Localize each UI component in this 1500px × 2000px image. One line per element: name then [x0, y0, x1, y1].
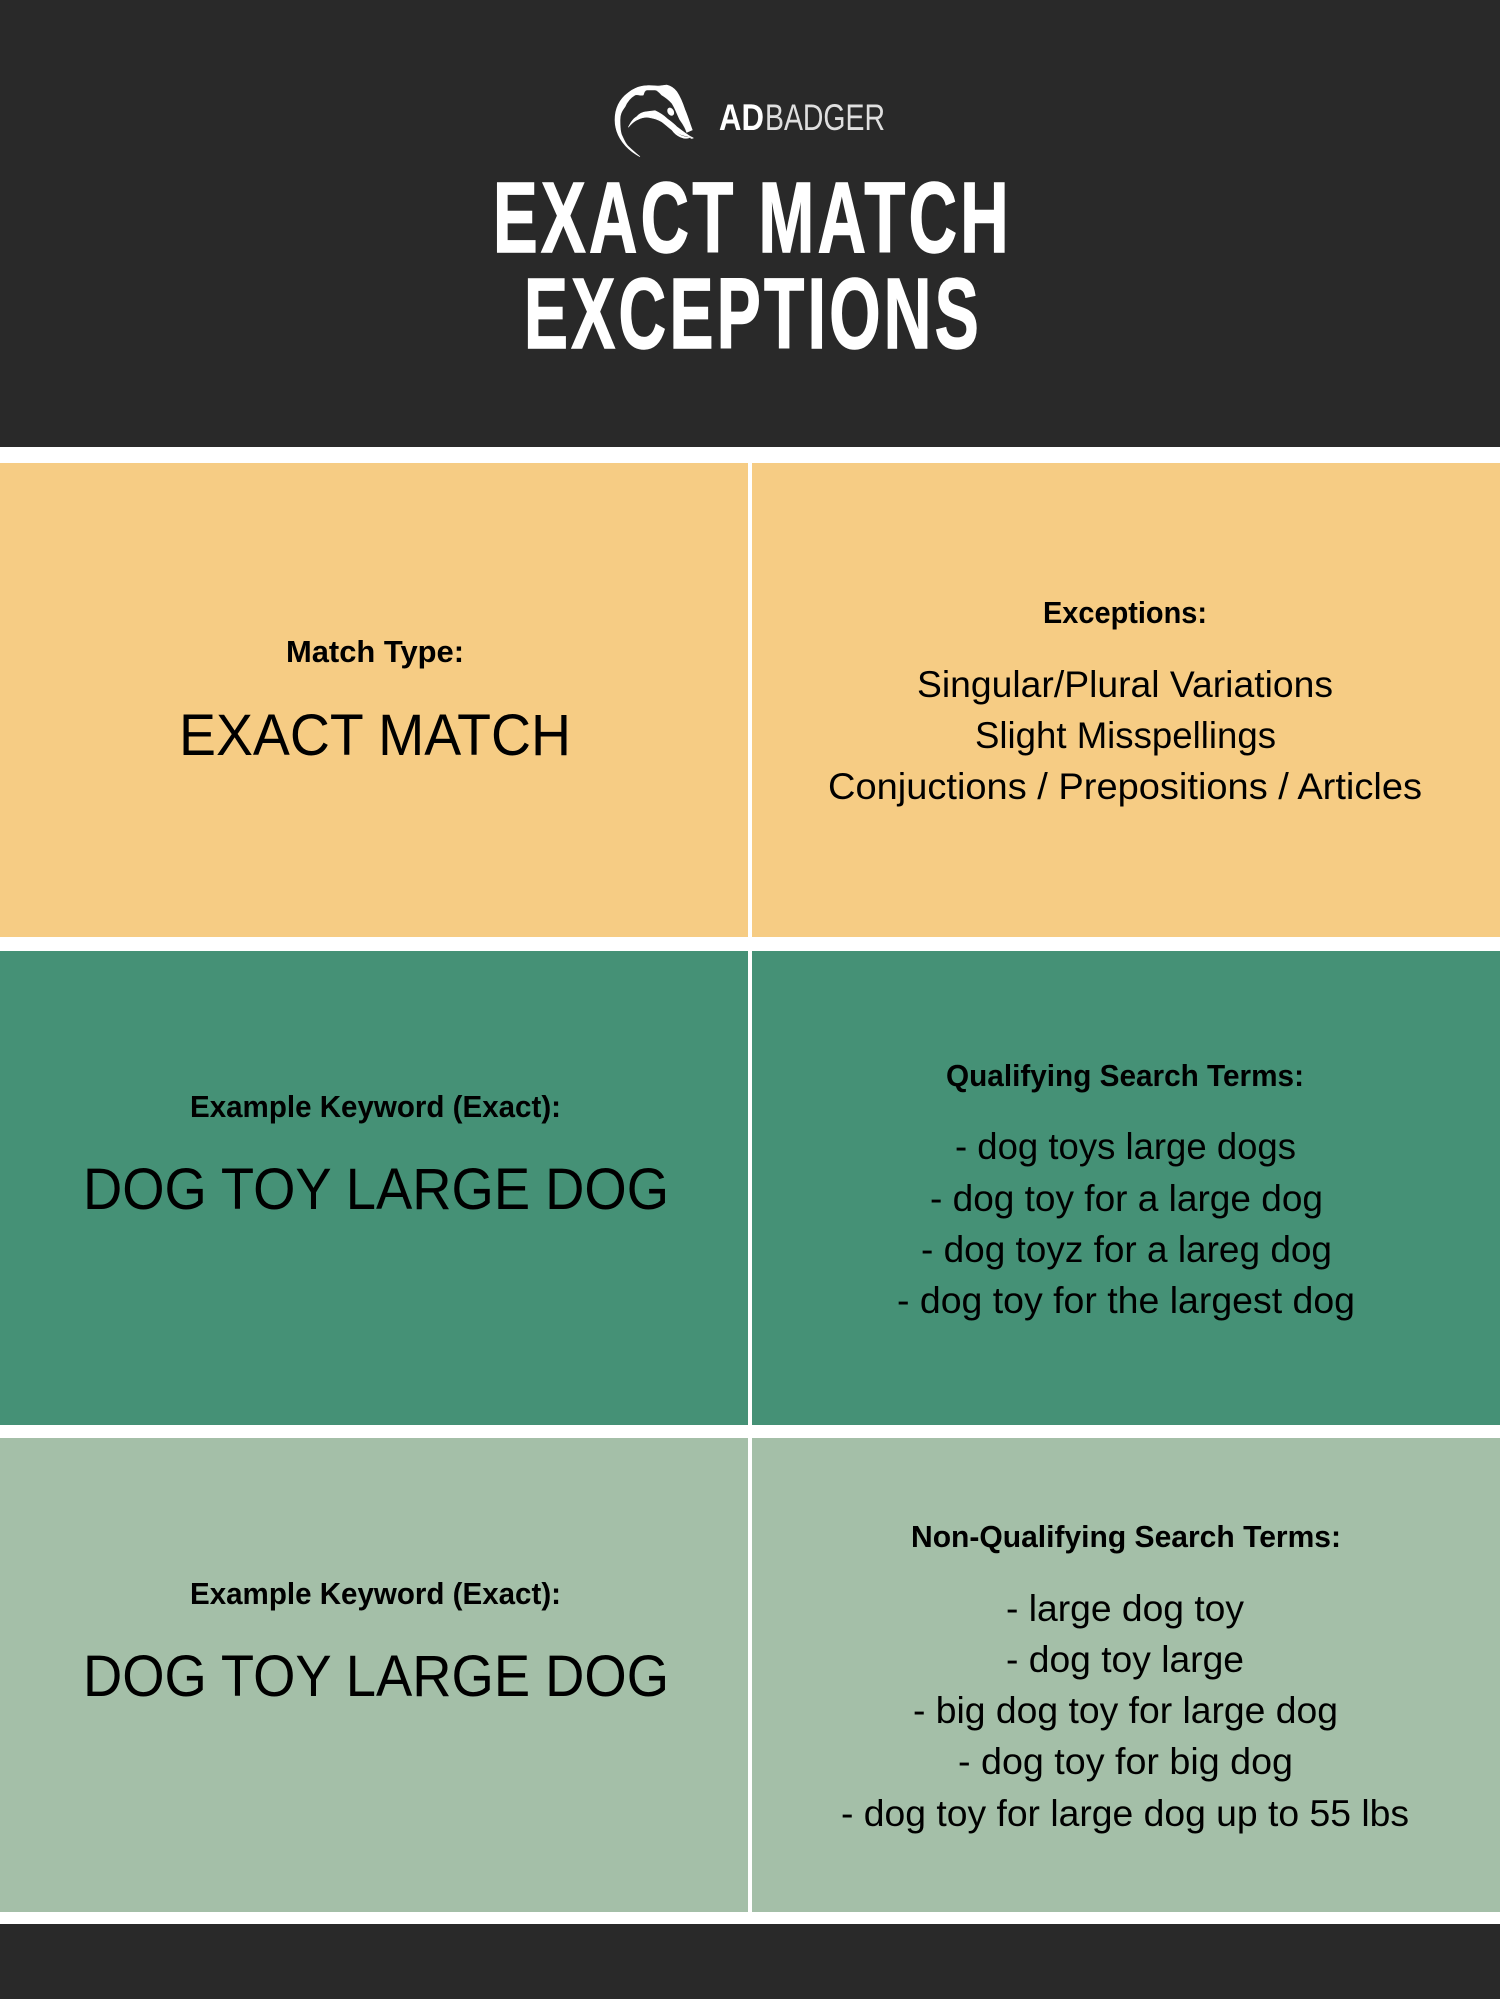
panel: exceptions	[752, 463, 1500, 937]
list: qualifying terms: - dog toyz for a lareg dog	[921, 1229, 1332, 1270]
list: non-qualifying terms: - dog toy for large dog up to 55 lbs	[841, 1793, 1409, 1834]
list: non-qualifying terms	[841, 1588, 1409, 1834]
list: exceptions: Slight Misspellings	[975, 715, 1276, 756]
panel: match type	[0, 463, 748, 937]
heading: qualifying search terms: Qualifying Search Terms:	[946, 1058, 1304, 1093]
list: qualifying terms	[897, 1126, 1355, 1321]
list: qualifying terms: - dog toy for a large dog	[930, 1178, 1323, 1219]
list: qualifying terms: - dog toy for the largest dog	[897, 1280, 1355, 1321]
panel: example keyword 2	[0, 1438, 748, 1912]
title: EXACT MATCH	[493, 162, 1012, 274]
panel: example keyword	[0, 951, 748, 1425]
header band	[0, 0, 1500, 447]
logo wordmark: AD	[719, 97, 764, 138]
heading: example keyword 2: Example Keyword (Exact):	[190, 1576, 561, 1611]
icon: badger	[615, 85, 693, 157]
list: qualifying terms: - dog toys large dogs	[955, 1126, 1296, 1167]
list: non-qualifying terms: - dog toy large	[1006, 1639, 1244, 1680]
footer band	[0, 1924, 1500, 1999]
panel: non-qualifying search terms	[752, 1438, 1500, 1912]
list: exceptions: Conjuctions / Prepositions / Articles	[828, 766, 1422, 807]
list: non-qualifying terms: - big dog toy for large dog	[913, 1690, 1338, 1731]
title	[493, 162, 1012, 370]
value: exact match: EXACT MATCH	[179, 703, 571, 768]
logo wordmark	[719, 97, 885, 138]
list: non-qualifying terms: - large dog toy	[1006, 1588, 1244, 1629]
list: non-qualifying terms: - dog toy for big dog	[958, 1741, 1293, 1782]
logo: AdBadger	[615, 85, 885, 157]
logo wordmark: BADGER	[765, 97, 885, 138]
list: exceptions	[828, 664, 1422, 807]
value: dog toy large dog: DOG TOY LARGE DOG	[83, 1157, 669, 1222]
list: exceptions: Singular/Plural Variations	[917, 664, 1333, 705]
value: dog toy large dog 2: DOG TOY LARGE DOG	[83, 1644, 669, 1709]
heading: match type: Match Type:	[286, 634, 464, 669]
heading: exceptions: Exceptions:	[1043, 595, 1207, 630]
heading: non-qualifying search terms: Non-Qualifying Search Terms:	[911, 1519, 1341, 1554]
heading: example keyword: Example Keyword (Exact):	[190, 1089, 561, 1124]
panel: qualifying search terms	[752, 951, 1500, 1425]
title: EXCEPTIONS	[524, 258, 982, 370]
